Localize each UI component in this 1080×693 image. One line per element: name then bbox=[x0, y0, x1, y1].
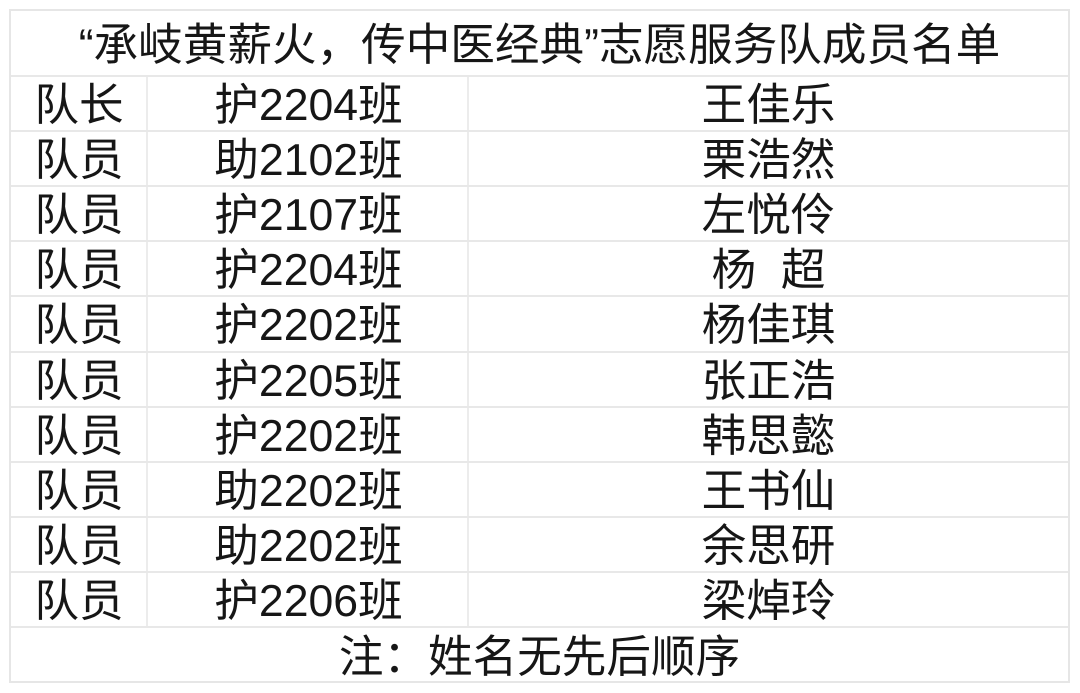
row: member 栗浩然: 队员 bbox=[34, 136, 124, 185]
row: member 梁焯玲: 梁焯玲 bbox=[702, 577, 835, 626]
row: captain 王佳乐: 队长 bbox=[34, 81, 124, 130]
row: member 杨佳琪: 杨佳琪 bbox=[702, 301, 835, 350]
row: member 左悦伶: 左悦伶 bbox=[702, 191, 835, 240]
footnote: 注：姓名无先后顺序 bbox=[339, 633, 740, 682]
row: member 余思研: 队员 bbox=[34, 522, 124, 571]
row: member 栗浩然: 栗浩然 bbox=[702, 136, 835, 185]
row: member 左悦伶: 队员 bbox=[34, 191, 124, 240]
row: member 王书仙: 队员 bbox=[34, 467, 124, 516]
row: member 杨佳琪: 队员 bbox=[34, 301, 124, 350]
row: member 张正浩: 护2205班 bbox=[214, 357, 403, 406]
row: member 韩思懿 bbox=[11, 408, 1068, 463]
row: captain 王佳乐: 护2204班 bbox=[214, 81, 403, 130]
title: “承岐黄薪火，传中医经典”志愿服务队成员名单 bbox=[79, 21, 1000, 70]
row: member 杨超: 队员 bbox=[34, 246, 124, 295]
row: member 梁焯玲: 护2206班 bbox=[214, 577, 403, 626]
row: captain 王佳乐 bbox=[11, 77, 1068, 132]
row: member 张正浩: 张正浩 bbox=[702, 357, 835, 406]
row: member 栗浩然 bbox=[11, 132, 1068, 187]
row: member 张正浩: 队员 bbox=[34, 357, 124, 406]
row: member 余思研: 助2202班 bbox=[214, 522, 403, 571]
row: member 杨超 bbox=[11, 242, 1068, 297]
row: member 韩思懿: 队员 bbox=[34, 412, 124, 461]
row: member 张正浩 bbox=[11, 353, 1068, 408]
row: member 杨佳琪 bbox=[11, 297, 1068, 353]
row: member 左悦伶: 护2107班 bbox=[214, 191, 403, 240]
row: member 王书仙: 王书仙 bbox=[702, 467, 835, 516]
row: member 王书仙 bbox=[11, 463, 1068, 518]
row: member 韩思懿: 韩思懿 bbox=[702, 412, 835, 461]
row: captain 王佳乐: 王佳乐 bbox=[702, 81, 835, 130]
row: member 栗浩然: 助2102班 bbox=[214, 136, 403, 185]
title bbox=[11, 11, 1068, 77]
row: member 左悦伶 bbox=[11, 187, 1068, 242]
row: member 杨超: 护2204班 bbox=[214, 246, 403, 295]
row: member 王书仙: 助2202班 bbox=[214, 467, 403, 516]
row: member 梁焯玲: 队员 bbox=[34, 577, 124, 626]
row: member 余思研: 余思研 bbox=[702, 522, 835, 571]
row: member 杨佳琪: 护2202班 bbox=[214, 301, 403, 350]
row: member 梁焯玲 bbox=[11, 573, 1068, 628]
row: member 韩思懿: 护2202班 bbox=[214, 412, 403, 461]
row: member 余思研 bbox=[11, 518, 1068, 573]
row: member 杨超: 杨 超 bbox=[712, 246, 825, 295]
